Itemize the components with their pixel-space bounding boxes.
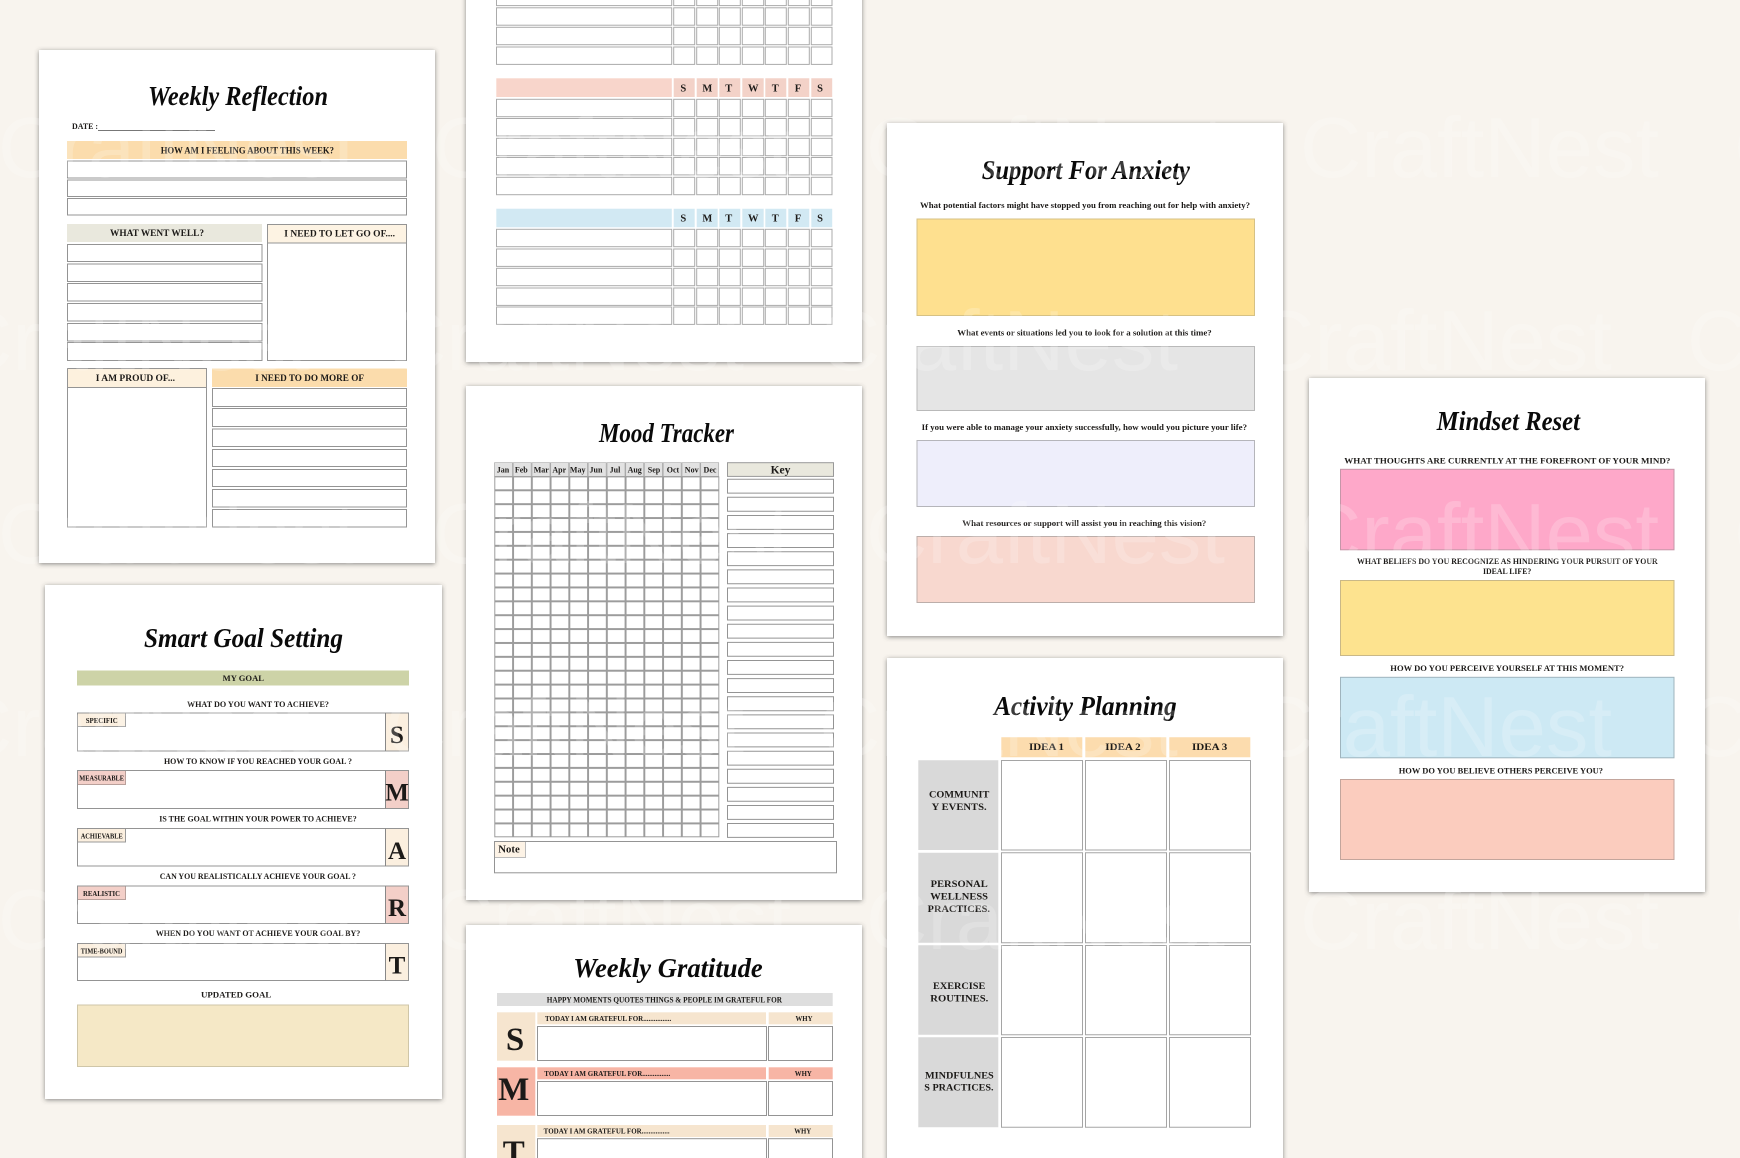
question 4 xyxy=(1340,765,1674,860)
measurable row: HOW TO KNOW IF YOU REACHED YOUR GOAL ? xyxy=(164,756,352,766)
section: I need to let go of xyxy=(268,224,406,360)
watermark text: CraftNest xyxy=(819,680,1178,775)
pink header: W xyxy=(748,84,759,94)
specific row: S xyxy=(390,722,404,749)
panel: mindset reset xyxy=(1309,378,1705,892)
row labels: COMMUNIT xyxy=(929,790,990,800)
realistic row: CAN YOU REALISTICALLY ACHIEVE YOUR GOAL ? xyxy=(160,871,356,881)
blue header: W xyxy=(748,214,759,224)
question 2: IDEAL LIFE? xyxy=(1483,567,1531,576)
row labels: ROUTINES. xyxy=(930,994,988,1004)
pink header: T xyxy=(725,84,732,94)
section: how am I feeling: HOW AM I FEELING ABOUT THIS WEEK? xyxy=(161,146,334,156)
section: how am I feeling xyxy=(67,141,407,215)
panel: activity planning xyxy=(887,658,1283,1158)
idea headers: IDEA 3 xyxy=(1192,743,1228,753)
day T: WHY xyxy=(794,1128,811,1136)
achievable row: A xyxy=(388,838,406,865)
section: I need to do more of: I NEED TO DO MORE OF xyxy=(255,374,364,384)
realistic row: REALISTIC xyxy=(83,889,120,898)
day S: S xyxy=(506,1022,524,1058)
measurable row: MEASURABLE xyxy=(79,774,124,782)
key rows xyxy=(728,479,834,837)
month header: Jul xyxy=(610,466,621,474)
realistic row xyxy=(78,871,409,924)
month header: Mar xyxy=(534,466,549,474)
title: mindset reset: Mindset Reset xyxy=(1436,406,1581,436)
my goal bar: MY GOAL xyxy=(223,673,264,683)
month header: Sep xyxy=(648,466,661,474)
question 3 xyxy=(917,422,1254,506)
question 3 xyxy=(1340,663,1674,758)
section: what went well xyxy=(67,224,262,360)
question 1: What potential factors might have stopped you from reaching out for help with anxiety? xyxy=(920,200,1250,210)
month header: Feb xyxy=(515,466,528,474)
watermark text: CraftNest xyxy=(1300,487,1659,582)
mood grid xyxy=(494,476,719,837)
question 2 xyxy=(1340,557,1674,656)
row labels: EXERCISE xyxy=(933,982,985,992)
my goal bar xyxy=(77,670,409,686)
blue header: F xyxy=(795,214,801,224)
key header xyxy=(728,463,834,476)
watermark text xyxy=(0,101,1740,968)
watermark text: CraftNest xyxy=(866,487,1225,582)
note box: Note xyxy=(498,845,520,856)
measurable row: M xyxy=(385,780,409,806)
row labels: S PRACTICES. xyxy=(924,1084,994,1094)
pink header: M xyxy=(702,84,712,94)
pink header xyxy=(496,78,832,97)
day M: TODAY I AM GRATEFUL FOR................ xyxy=(544,1071,671,1078)
watermark text: CraftNest xyxy=(385,294,744,389)
rows: top tracker xyxy=(496,0,832,64)
month header: Oct xyxy=(667,466,680,474)
watermark text: CraftNest xyxy=(1253,294,1612,389)
watermark text: CraftNest xyxy=(385,680,744,775)
title: weekly gratitude: Weekly Gratitude xyxy=(573,953,763,983)
achievable row xyxy=(78,814,409,866)
question 4: What resources or support will assist you in reaching this vision? xyxy=(962,518,1206,528)
realistic row: R xyxy=(388,895,407,922)
watermark text: CraftNest xyxy=(819,294,1178,389)
day S xyxy=(497,1012,833,1061)
day T xyxy=(497,1125,833,1158)
row labels: PRACTICES. xyxy=(928,905,990,915)
watermark text: CraftNest xyxy=(0,873,357,968)
row labels xyxy=(918,760,998,1127)
day T: TODAY I AM GRATEFUL FOR................ xyxy=(544,1128,670,1136)
blue header: M xyxy=(702,214,712,224)
idea headers xyxy=(1001,737,1250,757)
question 1 xyxy=(1340,456,1674,550)
updated goal xyxy=(78,990,408,1066)
watermark text: CraftNest xyxy=(432,873,791,968)
month header: Apr xyxy=(552,466,567,474)
achievable row: IS THE GOAL WITHIN YOUR POWER TO ACHIEVE? xyxy=(159,814,357,824)
title: smart goal setting: Smart Goal Setting xyxy=(144,623,343,653)
question 4: HOW DO YOU BELIEVE OTHERS PERCEIVE YOU? xyxy=(1399,765,1603,775)
month header: Nov xyxy=(685,466,699,474)
title: activity planning: Activity Planning xyxy=(992,691,1177,721)
idea headers: IDEA 1 xyxy=(1029,743,1064,753)
month header: Aug xyxy=(628,466,642,474)
month header: May xyxy=(570,466,585,474)
section: I need to do more of xyxy=(212,368,407,527)
title: mood tracker: Mood Tracker xyxy=(598,418,734,448)
pink header: S xyxy=(680,84,686,94)
date line: DATE : xyxy=(72,121,98,131)
rows: pink tracker xyxy=(496,99,832,195)
idea headers: IDEA 2 xyxy=(1105,743,1141,753)
section: I need to let go of: I NEED TO LET GO OF.... xyxy=(284,230,395,240)
panel: support for anxiety xyxy=(887,123,1283,636)
question 2: WHAT BELIEFS DO YOU RECOGNIZE AS HINDERING YOUR PURSUIT OF YOUR xyxy=(1357,557,1659,566)
key header: Key xyxy=(771,464,791,476)
panel: weekly reflection xyxy=(39,50,435,563)
pink header: T xyxy=(772,84,779,94)
time-bound row: TIME-BOUND xyxy=(81,946,122,956)
row labels: MINDFULNES xyxy=(925,1071,994,1081)
blue header xyxy=(496,209,832,227)
specific row: SPECIFIC xyxy=(86,716,118,725)
time-bound row: T xyxy=(389,952,406,980)
question 3: If you were able to manage your anxiety successfully, how would you picture your life? xyxy=(922,422,1247,432)
row labels: Y EVENTS. xyxy=(932,803,987,813)
panel: weekly gratitude xyxy=(466,925,862,1158)
panel: smart goal setting xyxy=(45,585,442,1099)
blue header: S xyxy=(680,214,686,224)
rows: blue tracker xyxy=(496,229,832,324)
specific row xyxy=(78,699,409,751)
month header: Jun xyxy=(590,466,603,474)
pink header: F xyxy=(795,84,801,94)
achievable row: ACHIEVABLE xyxy=(81,832,123,840)
idea cells xyxy=(1002,760,1250,1127)
time-bound row xyxy=(78,928,409,980)
panel: mood tracker xyxy=(466,386,862,900)
watermark text: CraftNest xyxy=(866,873,1225,968)
question 3: HOW DO YOU PERCEIVE YOURSELF AT THIS MOMENT? xyxy=(1390,663,1624,673)
watermark text: CraftNest xyxy=(1300,101,1659,196)
pink header: S xyxy=(817,84,823,94)
watermark text: CraftNest xyxy=(866,101,1225,196)
watermark text: CraftNest xyxy=(1300,873,1659,968)
time-bound row: WHEN DO YOU WANT OT ACHIEVE YOUR GOAL BY? xyxy=(156,928,360,938)
question 2 xyxy=(917,328,1254,410)
row labels: PERSONAL xyxy=(931,880,988,890)
month header: Jan xyxy=(497,466,510,474)
question 1 xyxy=(917,200,1254,316)
section: what went well: WHAT WENT WELL? xyxy=(110,229,204,239)
gratitude header: HAPPY MOMENTS QUOTES THINGS & PEOPLE IM GRATEFUL FOR xyxy=(547,996,782,1004)
watermark text: CraftNest xyxy=(432,101,791,196)
title: support for anxiety: Support For Anxiety xyxy=(982,155,1191,185)
blue header: T xyxy=(725,214,732,224)
day M: WHY xyxy=(795,1071,812,1078)
watermark text: CraftNest xyxy=(0,487,357,582)
section: I am proud of xyxy=(68,368,206,527)
day M xyxy=(497,1067,833,1116)
month header: Dec xyxy=(704,466,717,474)
day S: TODAY I AM GRATEFUL FOR................ xyxy=(545,1016,672,1023)
question 4 xyxy=(917,518,1254,602)
day S: WHY xyxy=(796,1016,813,1023)
question 2: What events or situations led you to look for a solution at this time? xyxy=(957,328,1212,338)
blue header: S xyxy=(817,214,823,224)
panel: habit tracker xyxy=(466,0,862,362)
row labels: WELLNESS xyxy=(930,893,988,903)
specific row: WHAT DO YOU WANT TO ACHIEVE? xyxy=(187,699,329,709)
note box xyxy=(494,842,836,873)
title: weekly reflection: Weekly Reflection xyxy=(148,81,328,111)
gratitude header xyxy=(497,993,833,1006)
watermark text: CraftNest xyxy=(1253,680,1612,775)
day M: M xyxy=(498,1072,529,1108)
measurable row xyxy=(78,756,409,808)
updated goal: UPDATED GOAL xyxy=(201,990,272,1000)
watermark text: CraftNest xyxy=(432,487,791,582)
watermark text: CraftNest xyxy=(0,101,357,196)
blue header: T xyxy=(772,214,779,224)
section: I am proud of: I AM PROUD OF... xyxy=(96,374,175,384)
question 1: WHAT THOUGHTS ARE CURRENTLY AT THE FOREFRONT OF YOUR MIND? xyxy=(1344,456,1670,466)
month header xyxy=(494,463,719,476)
